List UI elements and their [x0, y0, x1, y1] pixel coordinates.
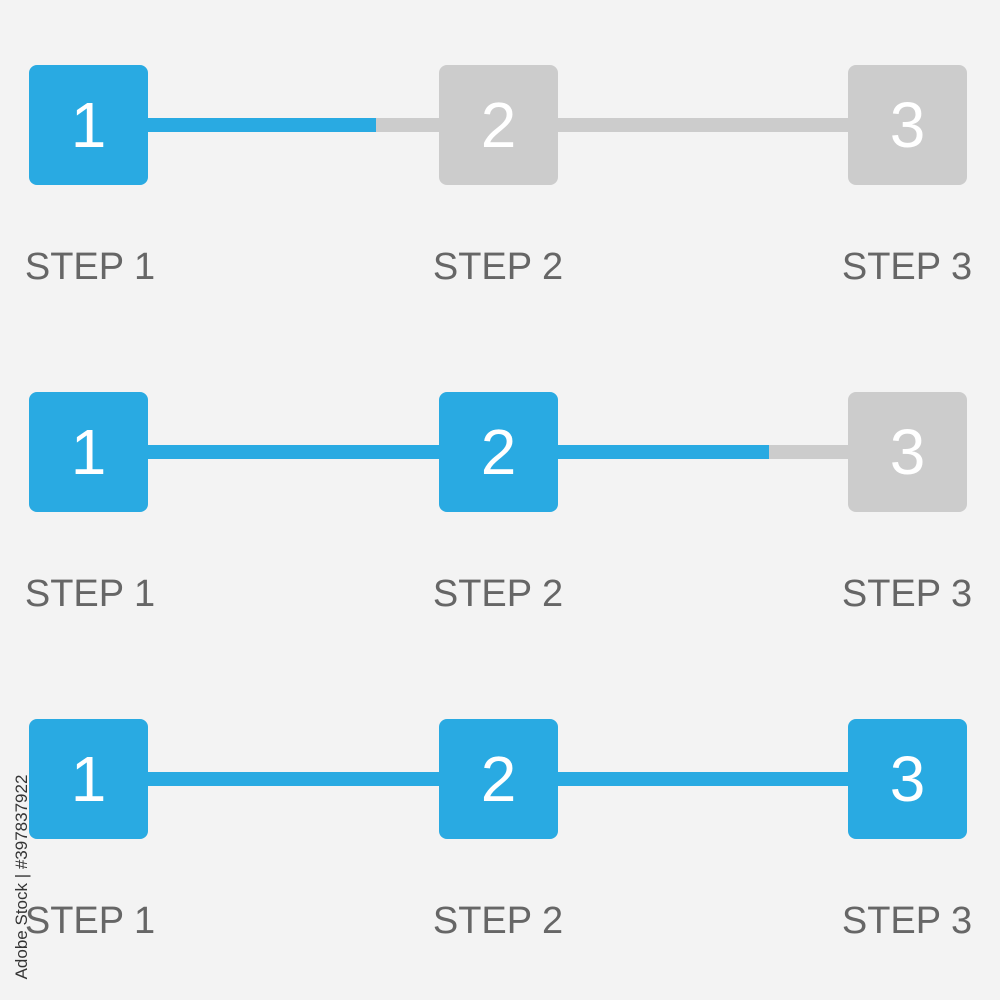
box 3 — [848, 392, 967, 512]
label 1: STEP 1 — [25, 246, 155, 288]
box 2 — [439, 65, 558, 185]
row 2: step 2 active — [25, 392, 972, 615]
box 3: 3 — [890, 416, 925, 488]
box 1: 1 — [71, 89, 106, 161]
box 1: 1 — [71, 416, 106, 488]
row 1: step 1 active — [25, 65, 972, 288]
box 2: 2 — [481, 416, 516, 488]
label 3: STEP 3 — [842, 246, 972, 288]
label 3: STEP 3 — [842, 900, 972, 942]
box 3: 3 — [890, 89, 925, 161]
label 2: STEP 2 — [433, 900, 563, 942]
box 1 — [29, 392, 148, 512]
label 1: STEP 1 — [25, 900, 155, 942]
progress line — [140, 445, 769, 459]
box 1: 1 — [71, 743, 106, 815]
progress line — [140, 118, 376, 132]
box 3 — [848, 65, 967, 185]
box 1 — [29, 65, 148, 185]
box 2 — [439, 392, 558, 512]
box 2: 2 — [481, 89, 516, 161]
row 3: step 3 active — [25, 719, 972, 942]
box 1 — [29, 719, 148, 839]
label 2: STEP 2 — [433, 573, 563, 615]
label 1: STEP 1 — [25, 573, 155, 615]
label 3: STEP 3 — [842, 573, 972, 615]
watermark id: Adobe Stock | #397837922 — [12, 775, 31, 979]
box 3 — [848, 719, 967, 839]
box 2 — [439, 719, 558, 839]
progress line — [140, 772, 856, 786]
box 2: 2 — [481, 743, 516, 815]
label 2: STEP 2 — [433, 246, 563, 288]
box 3: 3 — [890, 743, 925, 815]
